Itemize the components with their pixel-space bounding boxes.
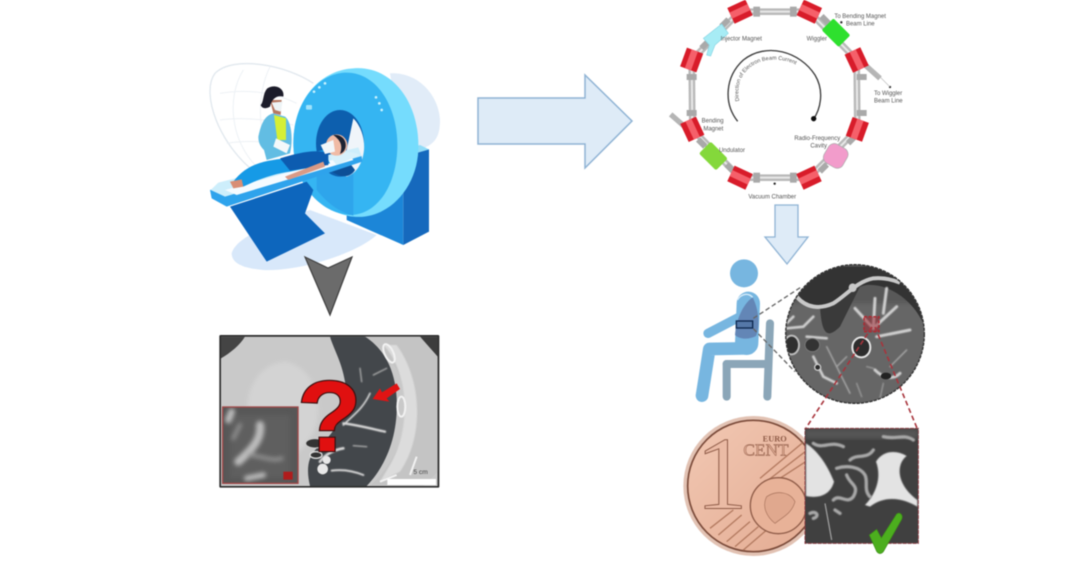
illustration: CT scanner with patient and technician (210, 64, 440, 270)
leader dots (773, 21, 891, 185)
coin text: CENT (743, 440, 789, 459)
component labels: Cavity (810, 143, 827, 149)
component labels (702, 14, 903, 201)
globe (750, 478, 806, 534)
check mark (869, 513, 902, 554)
component labels: Undulator (719, 148, 745, 154)
chair (727, 323, 770, 397)
red selection box (864, 317, 879, 332)
beam direction arrow (728, 51, 821, 121)
dashed zoom lines (753, 287, 802, 372)
component labels: Injector Magnet (721, 36, 762, 42)
component labels: Vacuum Chamber (748, 195, 796, 201)
panel: magnified micro-CT square with check mark (805, 428, 918, 554)
patient table (210, 147, 362, 262)
icon: seated person with lung and chair (702, 259, 802, 397)
scale bar (387, 479, 436, 485)
panel: CT scan image with question mark (219, 335, 439, 488)
question mark: ? (297, 360, 361, 472)
arrow: small down arrow (765, 205, 808, 264)
chamber connectors (687, 7, 867, 183)
undulator (699, 142, 728, 170)
arrow: grey downward arrowhead from scanner to CT image (305, 257, 352, 315)
technician (258, 86, 292, 160)
diagram: synchrotron storage ring (668, 0, 903, 201)
curved label: beam direction: Direction of Electron Beam Current (734, 56, 798, 102)
icon: one euro cent coin (682, 416, 806, 556)
component labels: Radio-Frequency (794, 136, 840, 142)
patient (230, 134, 360, 188)
component labels: To Wiggler (874, 91, 902, 97)
radio-frequency cavity (821, 141, 851, 171)
circular lung micro-CT view (784, 265, 927, 403)
chest wall (365, 336, 420, 338)
inset detail (223, 407, 298, 483)
lung (308, 337, 397, 486)
arrow: large right arrow (478, 75, 632, 168)
selected region box (736, 321, 753, 328)
beam line stubs (671, 63, 880, 128)
vacuum chamber ring (692, 12, 857, 178)
wiggler (822, 18, 850, 47)
background: grid sphere outline (210, 64, 313, 173)
person (702, 259, 758, 396)
bending magnets (680, 0, 869, 190)
component labels: To Bending Magnet (834, 14, 886, 20)
scale label: 5 cm (413, 469, 428, 476)
dark corners (221, 337, 245, 358)
component labels: Magnet (703, 126, 724, 132)
euro text: EURO (763, 435, 787, 444)
lung vessels (320, 368, 387, 475)
component labels: Wiggler (807, 37, 827, 43)
red pointer arrow (373, 383, 400, 402)
floor shadow (232, 210, 377, 270)
scanner base (347, 145, 429, 245)
dashed red zoom lines (806, 327, 917, 428)
lung highlight (735, 297, 758, 339)
gantry ring (293, 68, 418, 217)
injector magnet (703, 24, 728, 56)
coin engraved lines (710, 442, 805, 550)
numeral 1: 1 (696, 417, 748, 531)
scanner back shadow (390, 73, 440, 150)
component labels: Bending (702, 119, 724, 125)
component labels: Beam Line (846, 21, 875, 27)
ribs (380, 342, 417, 482)
component labels: Beam Line (874, 98, 903, 104)
